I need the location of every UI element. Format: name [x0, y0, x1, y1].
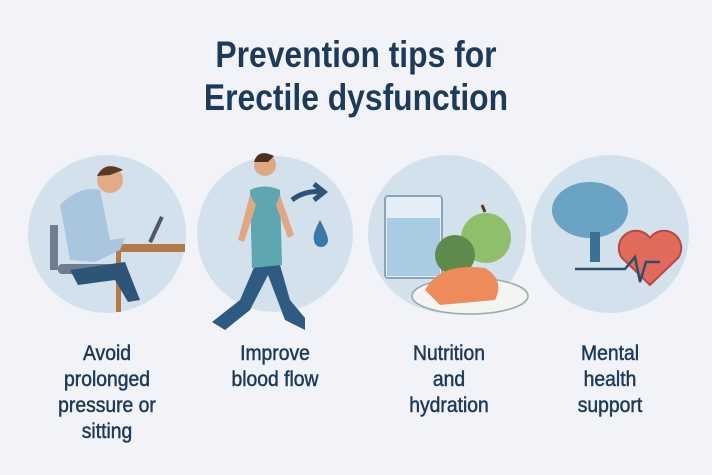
panel icon: water glass, apple, broccoli, salmon	[368, 155, 528, 314]
label: mental health	[578, 342, 642, 417]
label: nutrition: and	[433, 368, 465, 391]
label: mental health: support	[578, 394, 642, 417]
label: avoid sitting: pressure or	[58, 394, 156, 417]
title	[204, 34, 508, 118]
label: nutrition	[409, 342, 489, 417]
label: avoid sitting: prolonged	[64, 368, 150, 391]
label: nutrition: Nutrition	[413, 342, 485, 365]
title: Prevention tips for	[215, 34, 497, 75]
label: blood flow: blood flow	[232, 368, 318, 391]
label: avoid sitting	[58, 342, 156, 443]
label: avoid sitting: Avoid	[83, 342, 131, 365]
label: avoid sitting: sitting	[82, 420, 132, 443]
label: mental health: health	[584, 368, 636, 391]
title: Erectile dysfunction	[204, 77, 508, 118]
panel icon: brain and heart	[531, 155, 689, 313]
label: blood flow: Improve	[240, 342, 310, 365]
panel icon: walking man with arrow and drop	[197, 153, 353, 330]
panel icon: sitting man at laptop	[28, 155, 186, 313]
label: mental health: Mental	[581, 342, 639, 365]
label: blood flow	[232, 342, 319, 391]
label: nutrition: hydration	[409, 394, 489, 417]
